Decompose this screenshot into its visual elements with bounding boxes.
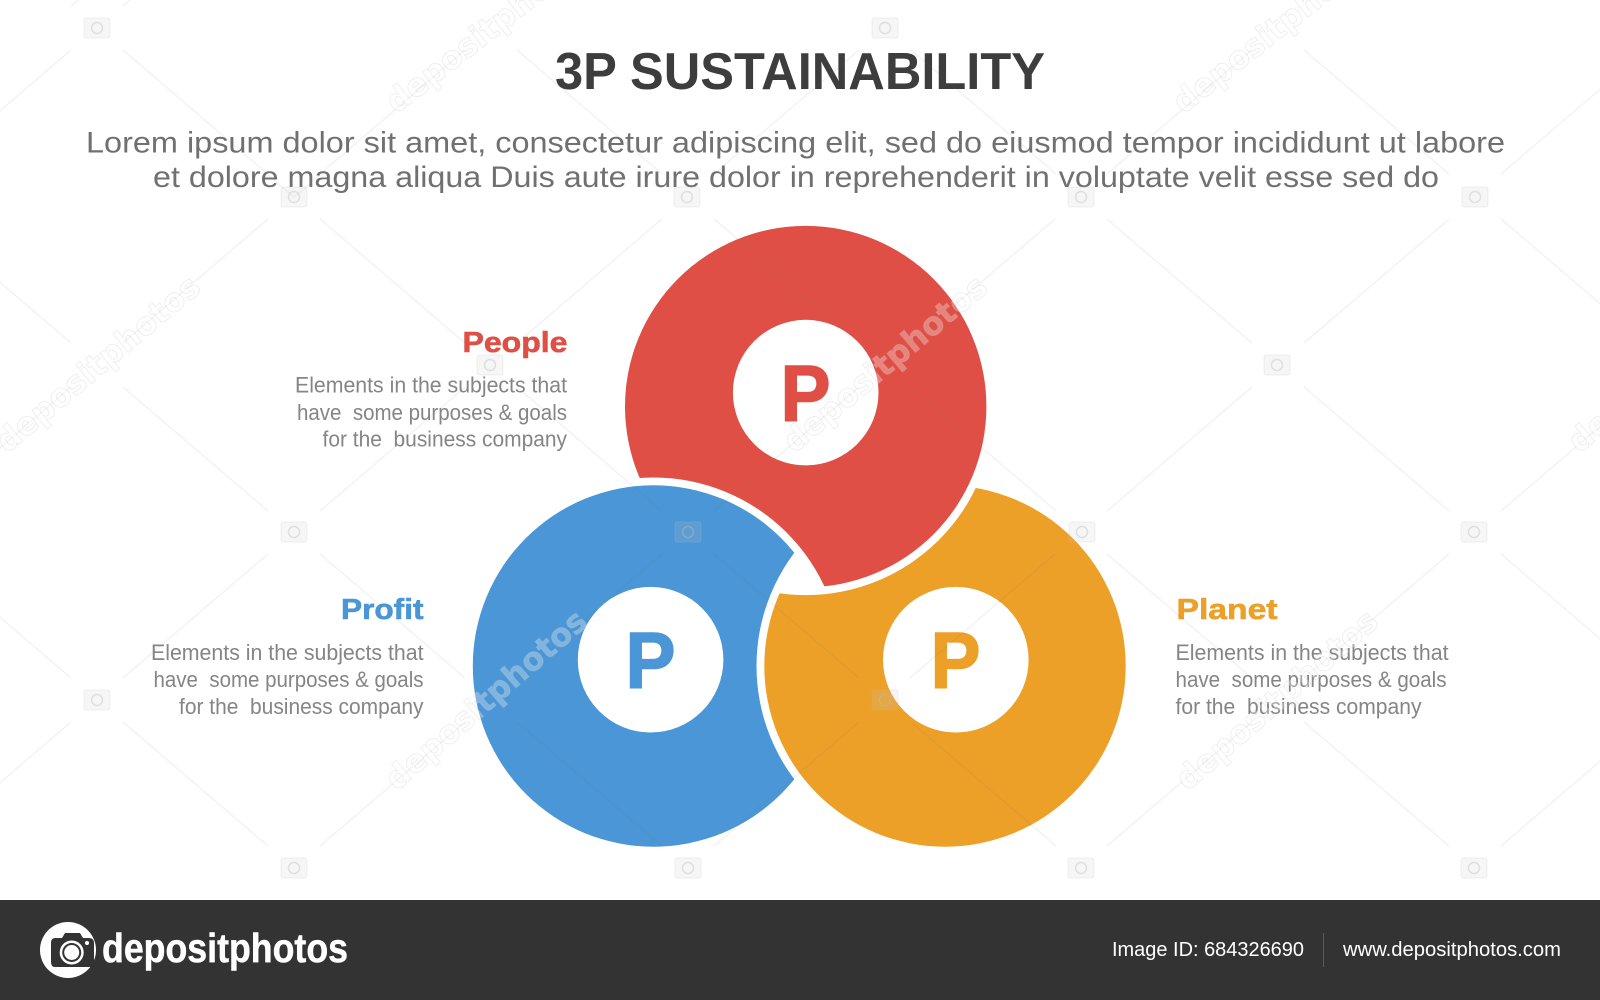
circle: people: P — [780, 349, 830, 438]
label: profit: Profit — [341, 594, 424, 626]
website: www.depositphotos.com — [1342, 939, 1561, 961]
subtitle text: Lorem ipsum dolor sit amet, consectetur adipiscing elit, sed do eiusmod tempor incididunt ut labore — [86, 126, 1505, 160]
label: profit — [151, 594, 424, 719]
circle: people — [625, 226, 986, 587]
watermark text — [0, 0, 1600, 798]
label: profit: for the business company — [179, 694, 424, 719]
label: planet: Elements in the subjects that — [1176, 640, 1448, 665]
title: 3P SUSTAINABILITY — [555, 43, 1045, 101]
watermark text: depositphotos — [377, 602, 594, 798]
watermark text: depositphotos — [1168, 602, 1385, 798]
label: people: People — [462, 327, 568, 359]
venn diagram — [473, 226, 1126, 847]
label: profit: Elements in the subjects that — [151, 640, 424, 665]
circle: planet — [764, 485, 1126, 847]
circle: profit: P — [626, 616, 676, 705]
label: people: Elements in the subjects that — [295, 372, 567, 398]
watermark camera marks — [84, 18, 1488, 878]
footer bar — [0, 900, 1600, 1000]
label: people: have some purposes & goals — [297, 400, 567, 425]
label: planet: have some purposes & goals — [1176, 667, 1446, 692]
circle: profit — [472, 485, 794, 847]
label: planet — [1176, 594, 1448, 719]
logo wordmark: depositphotos — [102, 925, 348, 971]
label: planet: Planet — [1176, 594, 1278, 626]
subtitle text — [86, 126, 1505, 194]
label: people — [295, 327, 568, 452]
label: profit: have some purposes & goals — [154, 667, 424, 692]
label: planet: for the business company — [1176, 694, 1422, 719]
image id: Image ID: 684326690 — [1112, 939, 1304, 961]
icon: camera logo — [40, 922, 96, 978]
circle: planet: P — [930, 616, 980, 705]
label: people: for the business company — [322, 426, 567, 452]
watermark text: depositphotos — [775, 267, 995, 460]
subtitle text: et dolore magna aliqua Duis aute irure dolor in reprehenderit in voluptate velit esse sed do — [153, 161, 1439, 194]
